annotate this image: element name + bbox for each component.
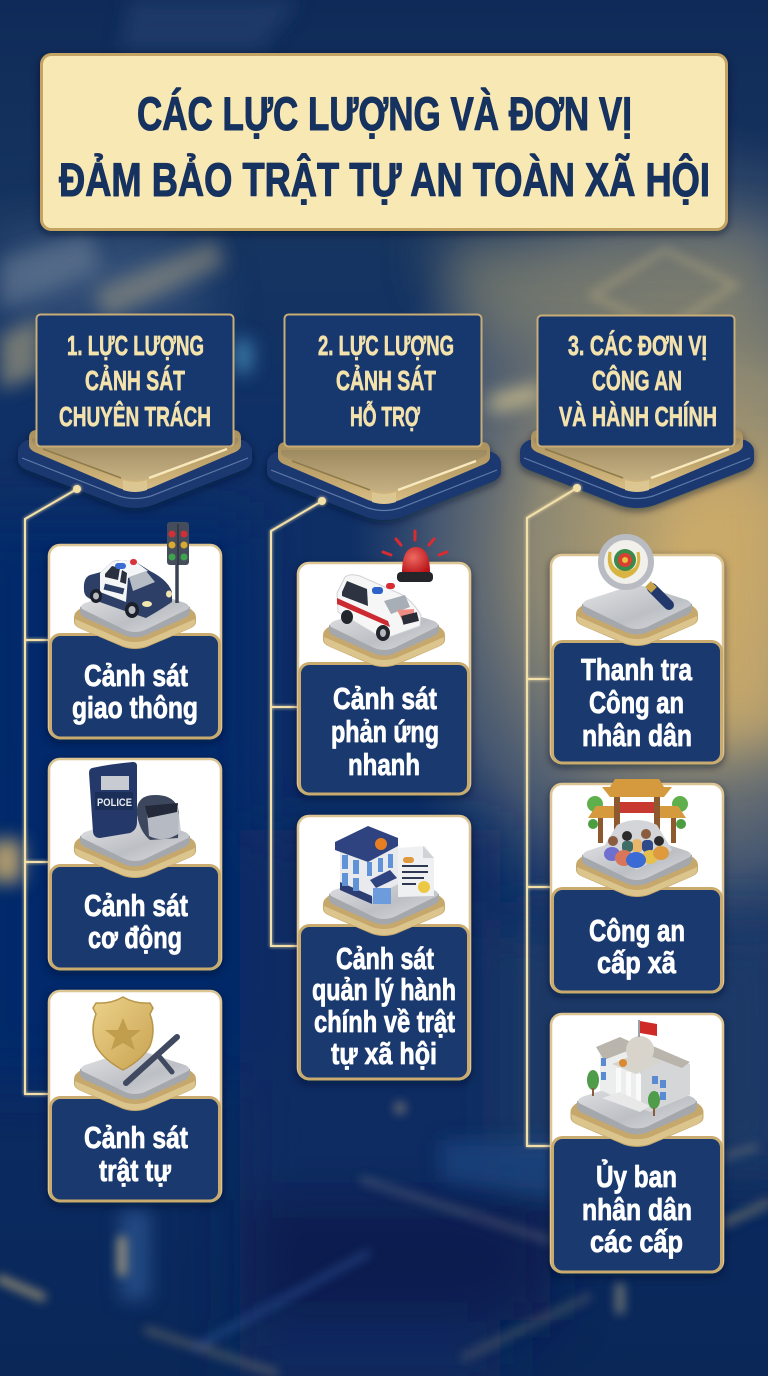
card: Cảnh sát trật tự xyxy=(49,991,221,1201)
card: Cảnh sát phản ứng nhanh xyxy=(298,531,470,794)
header text 1 xyxy=(59,330,211,432)
label text: cơ động xyxy=(88,920,182,955)
header box 1 xyxy=(36,314,234,446)
icon: ambulance and red siren xyxy=(323,531,447,667)
icon: magnifying glass with police emblem xyxy=(576,537,698,646)
icon: office building and document xyxy=(323,826,445,936)
card: Ủy ban nhân dân các cấp xyxy=(551,1014,723,1272)
label text xyxy=(72,658,198,725)
label text: nhanh xyxy=(348,747,420,782)
icon: police badge and baton xyxy=(74,997,196,1111)
label text: Ủy ban xyxy=(596,1158,677,1194)
label panel xyxy=(300,664,468,794)
label text: Cảnh sát xyxy=(84,888,188,923)
label panel xyxy=(552,1138,722,1272)
header 2: Lực lượng cảnh sát hỗ trợ xyxy=(267,314,501,520)
header box 2 xyxy=(284,314,482,446)
label panel xyxy=(552,642,722,763)
header text 2: HỖ TRỢ xyxy=(350,401,420,432)
label panel xyxy=(300,926,468,1079)
label text: Công an xyxy=(589,685,684,720)
label panel xyxy=(50,866,220,969)
header 3: Các đơn vị công an và hành chính xyxy=(520,316,754,508)
icon: government building with flag xyxy=(571,1020,703,1147)
label panel xyxy=(50,1098,220,1201)
header 1: Lực lượng cảnh sát chuyên trách xyxy=(18,314,252,508)
title banner xyxy=(42,54,726,230)
card body xyxy=(298,816,470,1079)
header text 1: 1. LỰC LƯỢNG xyxy=(67,330,204,361)
card: Cảnh sát giao thông xyxy=(49,522,221,738)
connector lines: column 2 xyxy=(271,497,326,946)
card body xyxy=(49,991,221,1201)
icon: police car and traffic light xyxy=(74,522,196,649)
card: Công an cấp xã xyxy=(551,779,723,992)
label text xyxy=(84,888,188,955)
label text: trật tự xyxy=(99,1153,171,1188)
connector lines: column 3 xyxy=(527,484,581,1146)
label text xyxy=(331,681,439,782)
header platform 1 xyxy=(18,430,252,508)
card body xyxy=(298,563,470,794)
label panel xyxy=(50,634,220,738)
icon: riot shield and helmet: POLICE xyxy=(97,797,132,809)
label panel xyxy=(552,888,722,992)
header text 1: CHUYÊN TRÁCH xyxy=(59,401,211,432)
icon: village gate and community xyxy=(576,779,698,897)
header text 2: 2. LỰC LƯỢNG xyxy=(318,330,454,361)
header text 3: 3. CÁC ĐƠN VỊ xyxy=(568,330,707,361)
connector lines: column 1 xyxy=(25,485,81,1094)
label text: Công an xyxy=(589,913,685,948)
header platform 3 xyxy=(520,430,754,508)
header text 2 xyxy=(318,330,454,432)
card body xyxy=(551,784,723,992)
label text xyxy=(581,652,693,753)
card: Cảnh sát quản lý hành chính xyxy=(298,816,470,1079)
label text: cấp xã xyxy=(597,945,677,980)
label text xyxy=(312,941,456,1071)
card body xyxy=(551,1014,723,1272)
header text 2: CẢNH SÁT xyxy=(336,364,436,396)
label text: nhân dân xyxy=(582,718,692,753)
card: Cảnh sát cơ động xyxy=(49,759,221,969)
header platform 2 xyxy=(267,442,501,520)
label text: phản ứng xyxy=(331,714,439,749)
label text xyxy=(84,1120,188,1188)
icon: riot shield and helmet xyxy=(74,762,196,878)
header text 3: CÔNG AN xyxy=(592,364,682,396)
label text: nhân dân xyxy=(582,1192,692,1227)
label text xyxy=(589,913,685,980)
card body xyxy=(49,545,221,738)
label text: giao thông xyxy=(72,690,198,725)
card body xyxy=(49,759,221,969)
label text: Thanh tra xyxy=(581,652,693,687)
card body xyxy=(551,555,723,763)
header text 3 xyxy=(559,330,717,432)
card: Thanh tra Công an nhân dân xyxy=(551,537,723,763)
header box 3 xyxy=(538,316,734,446)
label text xyxy=(582,1158,692,1259)
label text: Cảnh sát xyxy=(84,1120,188,1155)
header text 1: CẢNH SÁT xyxy=(85,364,185,396)
label text: Cảnh sát xyxy=(336,941,434,976)
label text: tự xã hội xyxy=(331,1036,437,1071)
title text xyxy=(59,87,710,206)
label text: các cấp xyxy=(590,1224,683,1259)
label text: chính về trật xyxy=(314,1004,455,1039)
label text: quản lý hành xyxy=(312,972,456,1007)
label text: Cảnh sát xyxy=(84,658,188,693)
label text: Cảnh sát xyxy=(333,681,437,716)
